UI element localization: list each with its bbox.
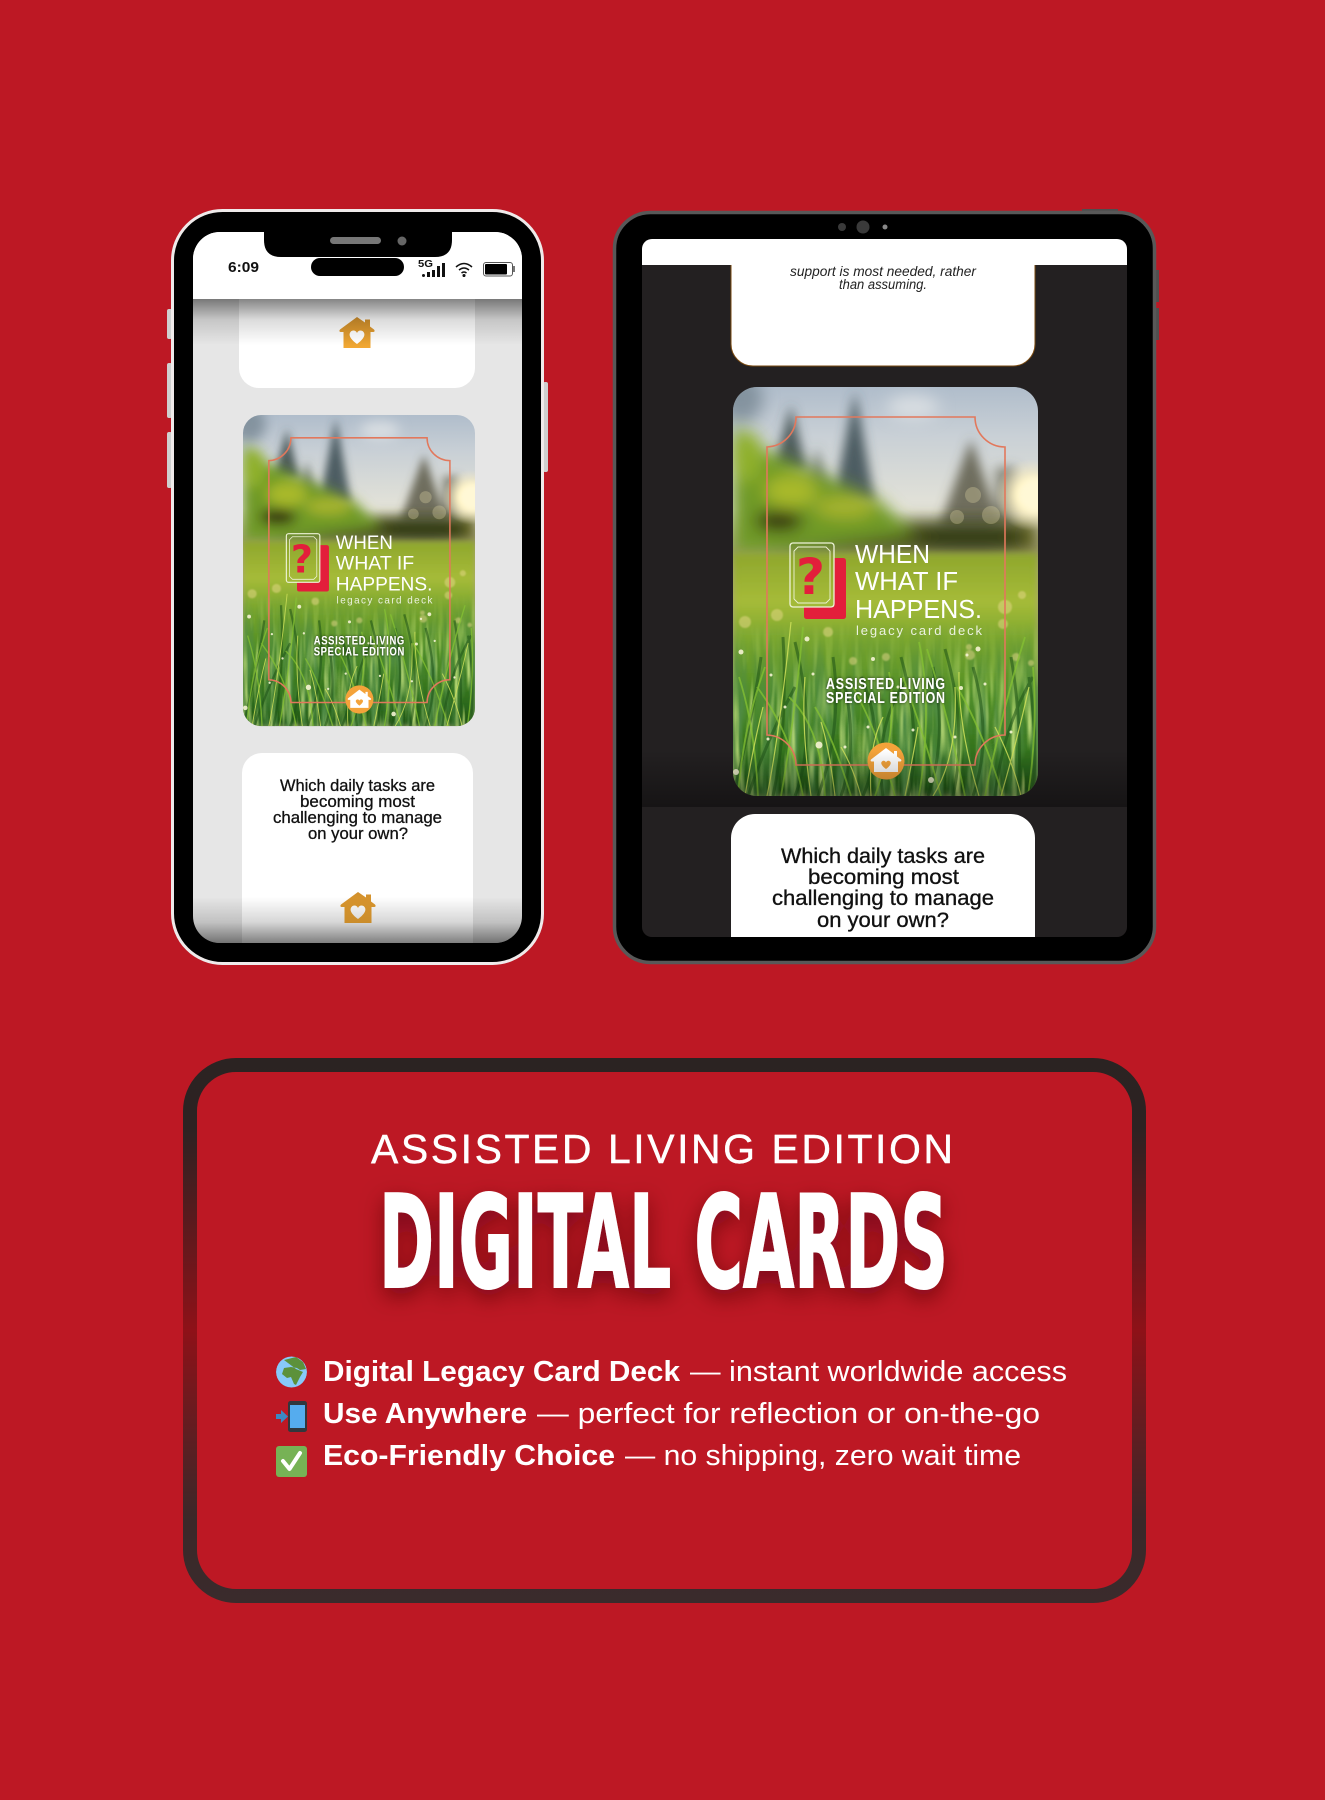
logo mark — [286, 534, 329, 591]
card front: assisted living — [243, 415, 475, 726]
icon: orange house — [340, 892, 376, 923]
previous card text: than assuming. — [839, 277, 927, 292]
question text: Which daily tasks are — [781, 844, 985, 868]
logo wordmark: WHAT IF — [855, 566, 958, 596]
bullet 1: — instant worldwide access — [690, 1356, 1067, 1388]
question text: on your own? — [817, 908, 949, 932]
house badge — [868, 742, 904, 780]
phone body — [172, 210, 542, 964]
logo wordmark: legacy card deck — [856, 623, 982, 638]
logo wordmark — [336, 532, 432, 607]
logo mark: ? — [796, 548, 825, 606]
next white question card — [242, 753, 473, 963]
logo wordmark: WHEN — [336, 532, 393, 554]
ornamental frame — [269, 438, 450, 703]
previous white card — [239, 299, 475, 388]
question text: challenging to manage — [772, 886, 994, 910]
question text — [772, 844, 994, 932]
edition label: SPECIAL EDITION — [314, 645, 404, 659]
question text: Which daily tasks are — [280, 777, 435, 795]
top scroll shadow — [193, 299, 522, 339]
phone mockup — [167, 210, 548, 964]
tablet cameras — [838, 220, 888, 234]
heading: edition: ASSISTED LIVING EDITION — [371, 1126, 953, 1172]
tablet screen — [642, 239, 1127, 974]
bullet 3: Eco-Friendly Choice — [323, 1440, 615, 1472]
top white bar — [642, 239, 1127, 265]
bullet list — [276, 1356, 1067, 1477]
previous card text: support is most needed, rather — [790, 264, 977, 279]
ornamental frame — [767, 417, 1005, 765]
status: signal: 5G — [418, 258, 433, 270]
icon: orange house — [339, 317, 375, 348]
tablet mockup — [614, 209, 1159, 974]
tablet body — [614, 212, 1154, 962]
status: battery — [484, 262, 515, 276]
bullet 3 — [276, 1440, 1021, 1477]
bullet 1 — [276, 1356, 1067, 1388]
logo wordmark: legacy card deck — [337, 596, 432, 607]
phone side buttons — [167, 309, 548, 488]
bullet 2: Use Anywhere — [323, 1398, 527, 1430]
question text: becoming most — [808, 865, 959, 889]
status: dynamic pill — [311, 258, 404, 276]
edition label: ASSISTED LIVING — [826, 675, 945, 692]
logo wordmark: HAPPENS. — [855, 594, 982, 624]
icon: mobile with arrow — [276, 1401, 307, 1432]
bullet 2: — perfect for reflection or on-the-go — [537, 1398, 1040, 1430]
next white question card — [731, 814, 1035, 937]
logo wordmark — [855, 539, 982, 638]
bottom scroll shadow — [193, 902, 522, 943]
previous white card — [730, 265, 1036, 366]
logo wordmark: WHEN — [855, 539, 930, 569]
icon: check mark — [276, 1446, 307, 1477]
status bar — [193, 232, 522, 299]
icon: globe — [276, 1356, 307, 1388]
previous card text — [790, 264, 977, 292]
phone screen — [193, 232, 522, 963]
bullet 3: — no shipping, zero wait time — [625, 1440, 1021, 1472]
panel frame — [190, 1065, 1139, 1596]
question text: becoming most — [300, 793, 415, 811]
notch — [264, 232, 452, 257]
edition label — [314, 635, 404, 659]
edition label: SPECIAL EDITION — [826, 689, 945, 706]
tablet side buttons — [1082, 209, 1159, 340]
edition label: ASSISTED LIVING — [314, 635, 404, 648]
panel: digital cards info — [190, 1065, 1139, 1596]
logo wordmark: HAPPENS. — [336, 574, 432, 596]
question text — [273, 777, 442, 843]
bullet 1: Digital Legacy Card Deck — [323, 1356, 680, 1388]
question text: on your own? — [308, 825, 408, 843]
logo mark: ? — [291, 537, 313, 581]
card front: assisted living — [733, 387, 1038, 796]
status: wifi — [456, 264, 472, 276]
edition label — [826, 675, 945, 706]
bottom fade band — [642, 750, 1127, 807]
bullet 2 — [276, 1398, 1040, 1432]
logo mark — [790, 543, 846, 619]
status: time: 6:09 — [228, 259, 259, 276]
logo wordmark: WHAT IF — [336, 552, 414, 574]
house badge — [345, 685, 373, 714]
question text: challenging to manage — [273, 809, 442, 827]
status: signal — [418, 258, 445, 277]
